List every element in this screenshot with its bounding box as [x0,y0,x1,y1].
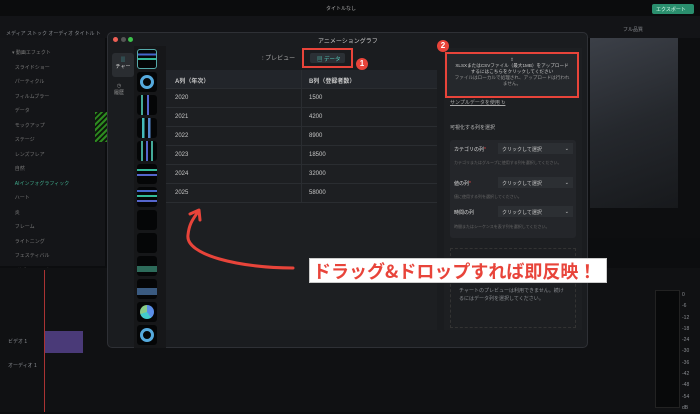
export button: エクスポート [656,7,686,13]
timeline [0,268,700,412]
chart preview placeholder [450,248,576,328]
data table panel: 18500 [309,152,326,158]
column selectors: カテゴリの列* [454,147,486,153]
column selectors: ⌄ [565,209,569,215]
audio meter: -30 [682,348,689,354]
badge 2: 2 [441,41,445,50]
audio meter: -12 [682,315,689,321]
app toolbar: メディア ストック オーディオ タイトル ト [6,31,101,37]
column selectors: 値の列* [454,181,471,187]
dialog: animation graph: ◷ [117,83,121,89]
audio meter: dB [682,405,688,411]
audio meter: -48 [682,382,689,388]
audio meter: -24 [682,337,689,343]
app toolbar: フル品質 [623,27,643,33]
export button [652,4,694,14]
chart type icons column [134,46,166,348]
table header: B列（登録者数） [309,79,355,85]
dialog title bar: アニメーショングラフ [318,39,378,45]
upload box: ファイルはローカルで処理され、アップロードは行われ [455,75,569,80]
badge 2 [437,40,449,52]
column selectors: 時間またはシーケンスを表す列を選択してください。 [454,224,550,229]
audio meter: 0 [682,292,685,298]
nav: chart / history [112,53,134,77]
left sidebar: effects list: データ [15,108,30,114]
data table panel: 2024 [175,171,188,177]
column selectors: クリックして選択 [502,147,542,153]
dialog title bar [113,37,378,45]
left sidebar: effects list: 炎 [15,210,20,216]
green effect thumbnail [95,112,107,142]
highlight box 2 [445,52,579,98]
data table panel: 2023 [175,152,188,158]
table header: A列（年次） [175,79,209,85]
audio meter: -54 [682,394,689,400]
chart preview placeholder: るにはデータ列を選択してください。 [459,296,544,302]
right settings panel: サンプルデータを使用 ↻ [450,100,505,106]
text: ▤ データ [317,57,341,63]
preview area [588,38,700,238]
left sidebar: effects list: ステージ [15,137,35,143]
column selectors: クリックして選択 [502,181,542,187]
column selectors: 値に使用する列を選択してください。 [454,194,522,199]
nav: chart / history: ▥ [120,57,126,63]
left sidebar: effects list: ハート [15,195,30,201]
column selectors: カテゴリまたはグループに使用する列を選択してください。 [454,160,562,165]
left sidebar: effects list: スライドショー [15,64,50,70]
left sidebar: effects list [0,38,105,266]
arrow: curved red [186,208,294,270]
column selectors: ⌄ [565,180,569,186]
tabs: preview / data: ⫶ プレビュー [262,56,295,62]
dialog: animation graph [107,32,588,348]
data table panel: 58000 [309,190,326,196]
left sidebar: effects list: 自然 [15,166,25,172]
table header [166,70,437,89]
audio meter [655,290,690,411]
column selectors: 時間の列 [454,210,474,216]
data table panel: 2021 [175,114,188,120]
data table panel [166,70,437,330]
column selectors [450,140,576,238]
audio meter: -36 [682,360,689,366]
upload box: するにはこちらをクリックしてください [471,69,553,74]
timeline: ビデオ 1 [8,339,27,345]
right settings panel [444,48,582,330]
left sidebar: effects list: フィルムブラー [15,94,49,100]
data table panel: 2025 [175,190,188,196]
left sidebar: effects list: レンズフレア [15,152,45,158]
left sidebar: effects list: パーティクル [15,79,44,85]
data table panel: 8900 [309,133,322,139]
text: ▸ ボディエフェクト [12,268,56,274]
left sidebar: effects list: AIインフォグラフィック [15,180,69,186]
left sidebar: effects list: ▾ 動画エフェクト [12,50,51,56]
badge 1 [356,58,368,70]
upload box [447,54,577,96]
left sidebar: effects list: フレーム [15,224,35,230]
data table panel: 32000 [309,171,326,177]
column selectors: クリックして選択 [502,210,542,216]
dialog: animation graph: 履歴 [114,90,124,96]
left sidebar: effects list: モックアップ [15,122,45,128]
nav: chart / history: チャー [116,64,130,70]
highlight box 1 [302,48,353,68]
left sidebar: effects list: フェスティバル [15,253,49,259]
left sidebar: effects list: ライトニング [15,238,45,244]
app top bar: タイトルなし [326,6,356,12]
callout banner: ドラッグ&ドロップすれば即反映！ [313,258,596,284]
column selectors: ⌄ [565,146,569,152]
upload box: ⇪ [510,57,514,62]
chart type icons [137,49,157,345]
right settings panel: 可視化する列を選択 [450,125,495,131]
upload box: ません。 [503,81,521,86]
data table panel: 1500 [309,95,322,101]
audio meter: -6 [682,303,686,309]
data table panel: 4200 [309,114,322,120]
audio meter: -42 [682,371,689,377]
data table panel: 2022 [175,133,188,139]
timeline: オーディオ 1 [8,363,37,369]
chart preview placeholder: チャートのプレビューは利用できません。続け [459,288,564,294]
app top bar [0,0,700,16]
audio meter: -18 [682,326,689,332]
app toolbar [0,16,700,38]
data table panel: 2020 [175,95,188,101]
upload box: XLSXまたはCSVファイル（最大1MB）をアップロード [455,63,569,68]
badge 1: 1 [360,59,364,68]
